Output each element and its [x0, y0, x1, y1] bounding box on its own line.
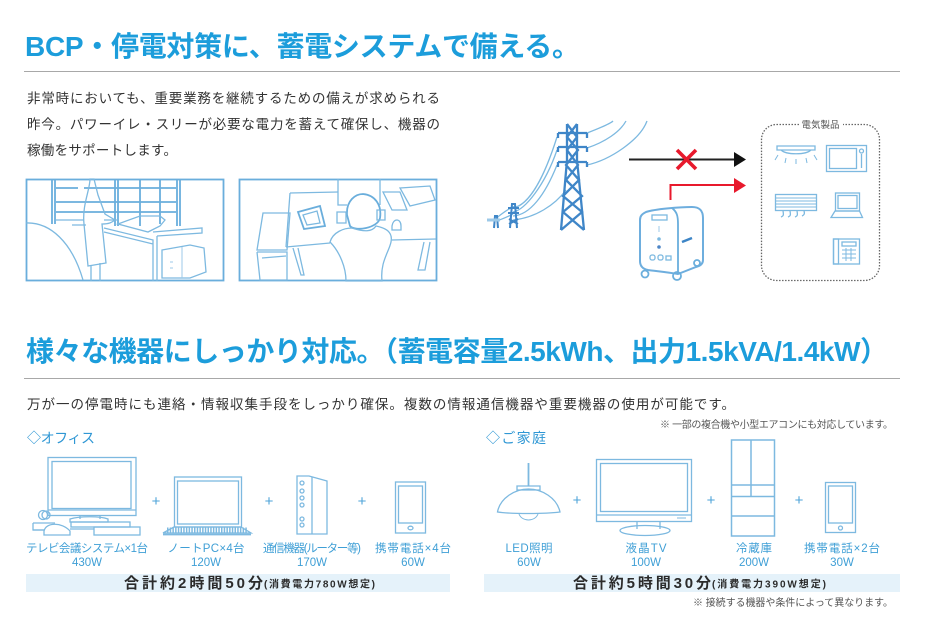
intro text: 昨今。パワーイレ・スリーが必要な電力を蓄えて確保し、機器の — [27, 117, 440, 132]
office device labels: テレビ会議システム×1台 — [26, 541, 148, 555]
title: BCP・停電対策に、蓄電システムで備える。 — [25, 31, 580, 62]
panel: electric appliances: 電気製品 — [802, 119, 840, 131]
icon: refrigerator — [732, 440, 775, 536]
office device labels — [26, 541, 451, 569]
plus: + — [795, 492, 804, 509]
intro text: 稼働をサポートします。 — [27, 143, 177, 158]
office device labels: 60W — [401, 557, 425, 569]
home device labels: 100W — [631, 557, 661, 569]
icon: laptop — [831, 193, 862, 218]
plus: + — [358, 493, 367, 510]
plus: + — [573, 492, 582, 509]
office device labels: ノートPC×4台 — [168, 541, 244, 555]
panel: office — [26, 430, 451, 592]
office heading: ◇オフィス — [27, 430, 95, 446]
home device labels: 液晶TV — [626, 542, 667, 555]
icon: video conference system — [33, 458, 140, 535]
plus: + — [707, 492, 716, 509]
home heading: ◇ご家庭 — [486, 430, 546, 446]
home total bar: (消費電力390W想定) — [712, 578, 826, 590]
icon: mobile phone — [396, 482, 426, 533]
intro text: 非常時においても、重要業務を継続するための備えが求められる — [27, 90, 440, 106]
home device labels: 冷蔵庫 — [736, 541, 772, 555]
home device labels: 30W — [830, 557, 854, 569]
home device labels: 60W — [517, 557, 541, 569]
icon: air conditioner — [776, 194, 816, 217]
panel: home — [484, 430, 900, 592]
icon: LCD TV — [596, 460, 692, 536]
icon: red cross — [677, 150, 696, 169]
office device labels: 170W — [297, 557, 327, 569]
office total bar — [26, 574, 450, 592]
home device labels: LED照明 — [506, 542, 552, 555]
illustration: office worker with battery — [26, 179, 224, 281]
plus: + — [152, 493, 161, 510]
arrow: battery power supply — [670, 178, 746, 200]
footnote: conditions: ※ 接続する機器や条件によって異なります。 — [693, 596, 893, 609]
icon: pendant light — [498, 463, 560, 520]
home device labels: 携帯電話×2台 — [804, 541, 880, 555]
icon: laptop — [163, 477, 251, 534]
icon: microwave — [826, 146, 866, 172]
intro text — [27, 90, 440, 158]
home device labels — [506, 541, 880, 569]
home total bar — [484, 574, 900, 592]
diagram: power tower — [487, 121, 647, 230]
icon: desk phone — [834, 239, 860, 264]
section heading: 様々な機器にしっかり対応。（蓄電容量2.5kWh、出力1.5kVA/1.4kW） — [26, 336, 888, 367]
home total bar: 合計約5時間30分 — [573, 575, 711, 592]
arrow: grid power blocked — [629, 150, 746, 169]
home device labels: 200W — [739, 557, 769, 569]
illustration: storage battery — [640, 207, 703, 280]
section description: 万が一の停電時にも連絡・情報収集手段をしっかり確保。複数の情報通信機器や重要機器の使用が可能です。 — [27, 396, 735, 412]
icon: network router — [297, 476, 327, 534]
office device labels: 通信機器(ルーター等) — [263, 541, 361, 555]
office device labels: 430W — [72, 557, 102, 569]
plus: + — [265, 493, 274, 510]
office device labels: 120W — [191, 557, 221, 569]
footnote: supported equipment: ※ 一部の複合機や小型エアコンにも対応しています。 — [660, 418, 893, 431]
panel: electric appliances — [762, 118, 880, 280]
icon: mobile phone — [826, 482, 856, 532]
office total bar: (消費電力780W想定) — [264, 578, 375, 590]
office total bar: 合計約2時間50分 — [124, 575, 263, 592]
office device labels: 携帯電話×4台 — [375, 541, 451, 555]
icon: ceiling light — [775, 146, 817, 164]
illustration: worker at desk from above — [240, 179, 436, 281]
